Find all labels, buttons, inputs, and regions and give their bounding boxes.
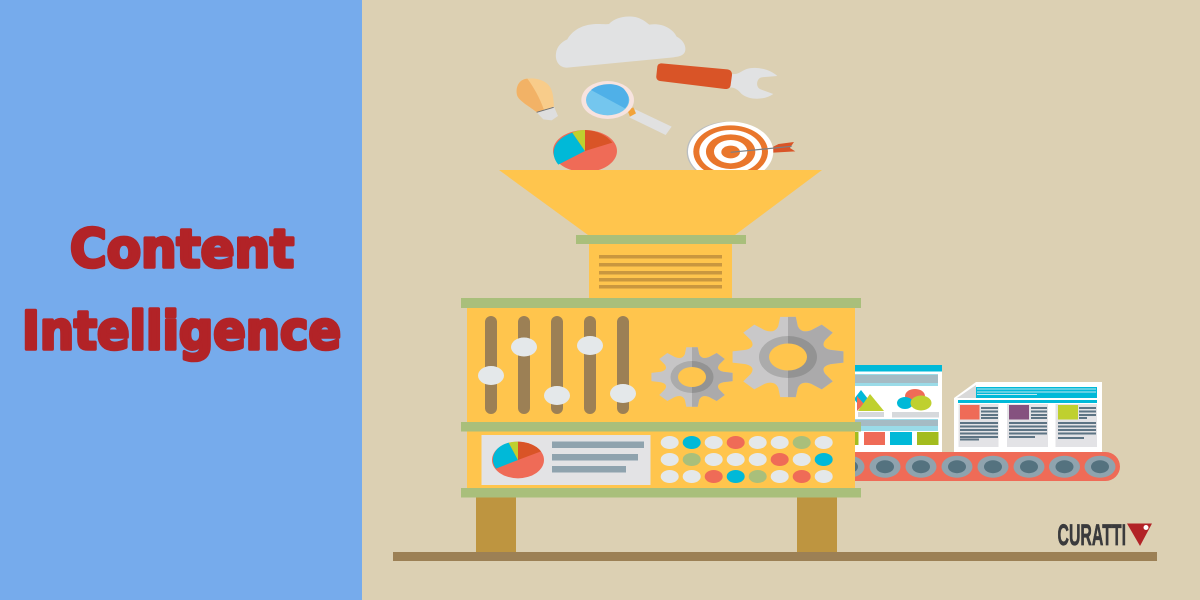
- legend bars: [552, 442, 644, 472]
- icon: small gear: [651, 347, 733, 407]
- sliders: [478, 316, 636, 414]
- panel: dashboard with pie chart: [482, 435, 650, 485]
- hopper neck band: [576, 235, 746, 244]
- floor: [393, 552, 1157, 561]
- icon: pie chart: [553, 130, 617, 172]
- icon: wrench: [656, 63, 777, 99]
- icon: cloud: [556, 16, 685, 68]
- title: Intelligence: [22, 301, 341, 362]
- document: chart page: [850, 365, 942, 452]
- icon: light bulb: [517, 78, 558, 120]
- machine body: [467, 305, 855, 491]
- neck box with vents: [589, 244, 732, 298]
- logo: Curatti: CURATTI: [1058, 519, 1126, 552]
- machine legs: [476, 495, 837, 552]
- document: three column page: [954, 382, 1102, 452]
- icon: target with arrow: [687, 122, 795, 182]
- title: Content: [70, 219, 294, 280]
- panel: blue title panel: [0, 0, 362, 600]
- icon: magnifying glass: [581, 81, 672, 135]
- title: [22, 219, 341, 362]
- background: [362, 0, 1200, 600]
- machine bands: [461, 298, 861, 498]
- funnel hopper: [499, 170, 822, 235]
- indicator dots: [661, 436, 833, 483]
- pie chart: [492, 442, 544, 478]
- icon: large gear: [733, 317, 843, 397]
- conveyor belt: [830, 452, 1120, 481]
